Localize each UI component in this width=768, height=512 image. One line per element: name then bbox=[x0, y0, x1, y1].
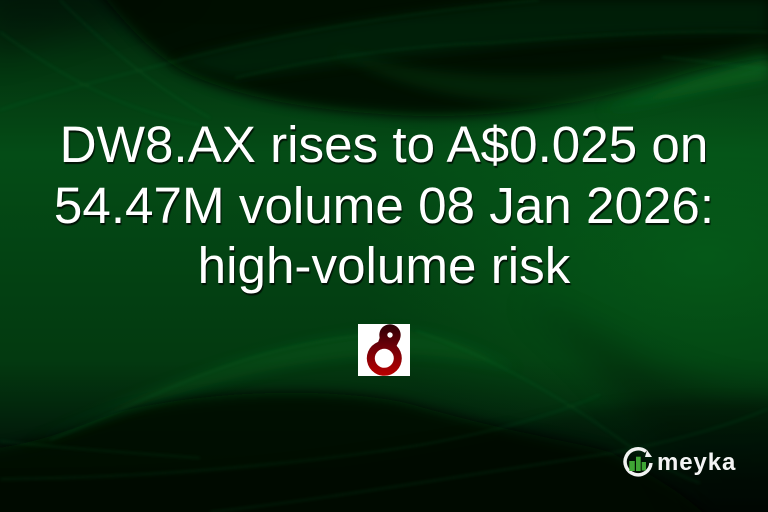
icon: meyka chart ring bbox=[625, 449, 652, 475]
brand: meyka logo bbox=[623, 447, 736, 477]
title: 54.47M volume 08 Jan 2026: bbox=[54, 176, 714, 234]
title: high-volume risk bbox=[198, 237, 570, 294]
title: DW8.AX rises to A$0.025 on bbox=[60, 116, 708, 173]
icon: company logo bbox=[358, 324, 410, 376]
brand name: meyka bbox=[657, 449, 736, 476]
title bbox=[54, 116, 714, 296]
